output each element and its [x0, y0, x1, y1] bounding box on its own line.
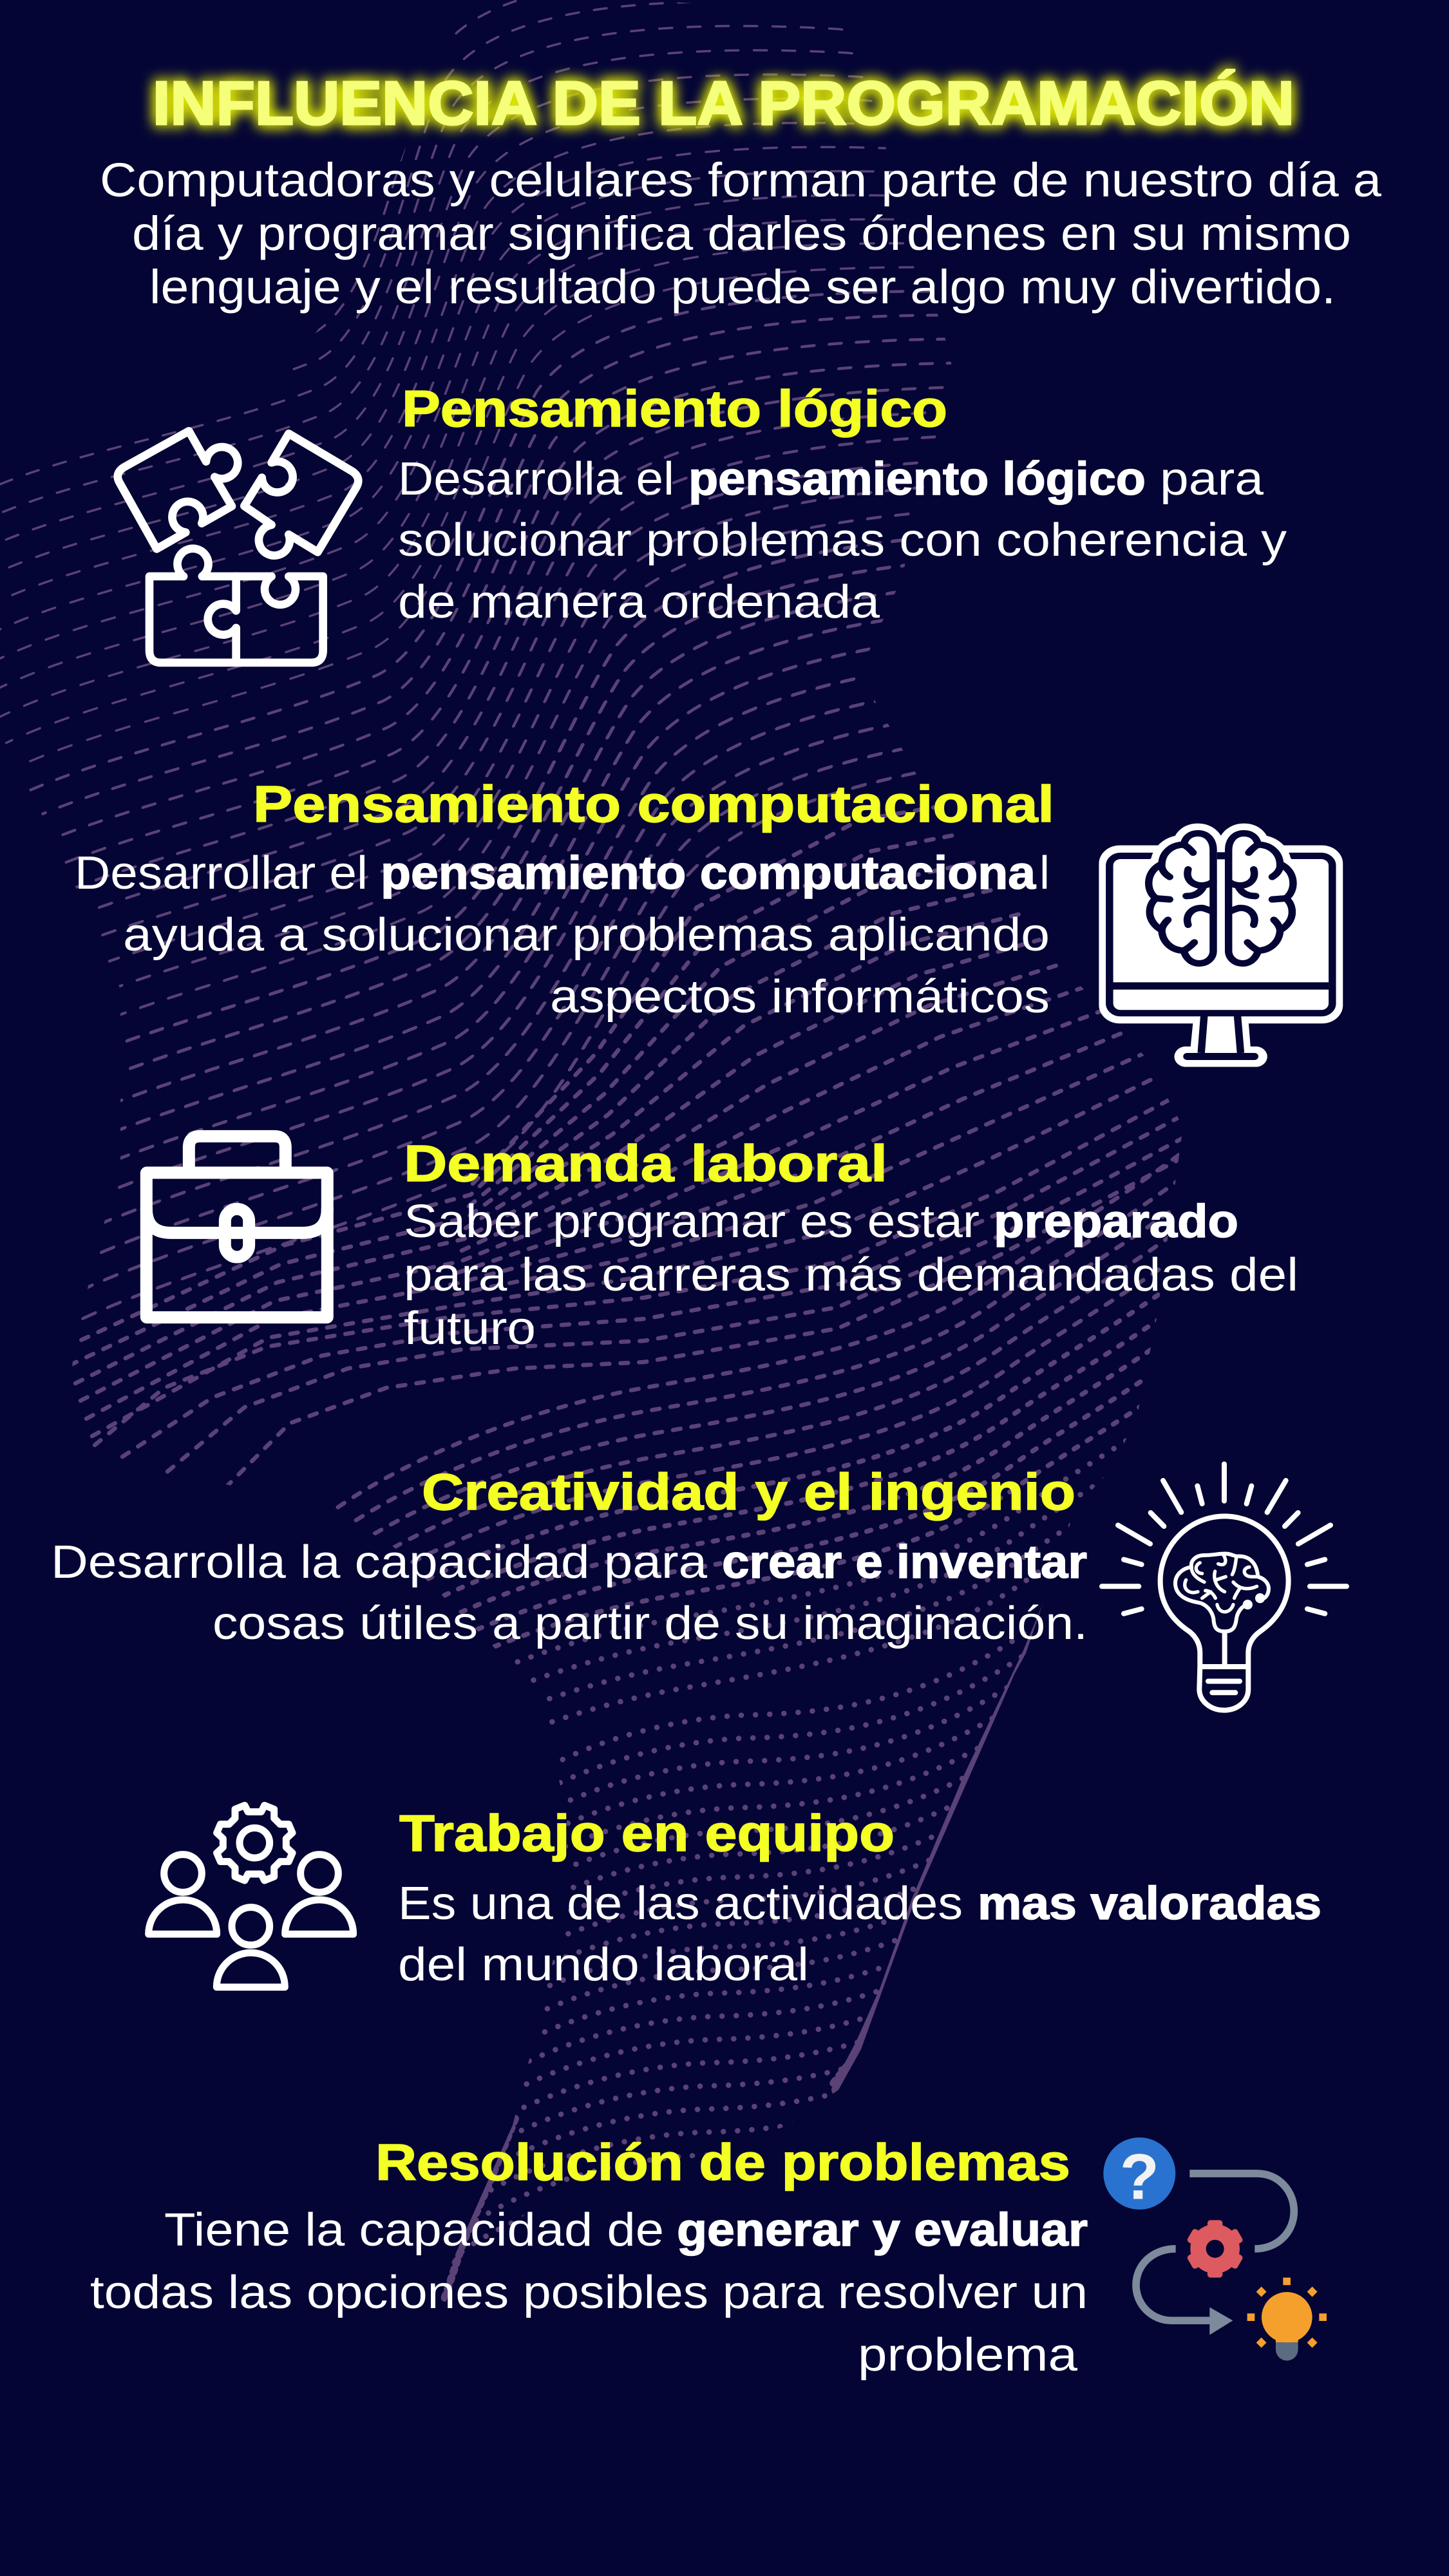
- arrow: path from question to gear to bulb: [1136, 2174, 1294, 2335]
- icon: briefcase: [146, 1136, 327, 1318]
- icon: orange light bulb: [1247, 2278, 1327, 2361]
- body text: [398, 1878, 1321, 1991]
- intro text: Computadoras y celulares forman parte de nuestro día a: [100, 153, 1382, 207]
- body text: [51, 1537, 1088, 1649]
- body text: ayuda a solucionar problemas aplicando: [123, 909, 1050, 961]
- intro text: día y programar significa darles órdenes en su mismo: [132, 207, 1351, 260]
- panel: Creatividad y el ingenio: [51, 1463, 1347, 1710]
- panel: Pensamiento computacional: [75, 775, 1343, 1067]
- body text: [75, 848, 1050, 1023]
- body text: del mundo laboral: [398, 1939, 809, 1991]
- heading: Pensamiento lógico: [402, 380, 947, 437]
- body text: pensamiento lógico: [688, 453, 1146, 505]
- heading: Creatividad y el ingenio: [422, 1463, 1075, 1520]
- body text: problema: [858, 2329, 1078, 2381]
- body text: solucionar problemas con coherencia y: [398, 515, 1287, 566]
- body text: de manera ordenada: [398, 576, 880, 628]
- body text: Desarrollar el: [75, 848, 368, 899]
- title: INFLUENCIA DE LA PROGRAMACIÓN: [153, 69, 1294, 138]
- icon: puzzle pieces: [118, 431, 358, 663]
- body text: futuro: [404, 1303, 536, 1354]
- body text: preparado: [994, 1196, 1238, 1247]
- icon: question mark circle: [1103, 2137, 1175, 2213]
- body text: Desarrolla el: [398, 453, 674, 505]
- body text: mas valoradas: [978, 1878, 1321, 1929]
- body text: para: [1160, 453, 1264, 505]
- background: dotted wave: [0, 0, 1182, 2302]
- panel: Trabajo en equipo: [149, 1804, 1321, 1991]
- heading: Trabajo en equipo: [399, 1804, 895, 1862]
- icon: monitor with brain: [1099, 833, 1343, 1067]
- icon: problem solving flow: [1103, 2137, 1327, 2361]
- heading: Pensamiento computacional: [253, 775, 1054, 833]
- icon: light bulb with brain: [1102, 1464, 1347, 1710]
- heading: Demanda laboral: [404, 1135, 887, 1192]
- body text: Es una de las actividades: [398, 1878, 963, 1929]
- body text: aspectos informáticos: [550, 971, 1050, 1023]
- panel: Demanda laboral: [146, 1135, 1298, 1354]
- body text: para las carreras más demandadas del: [404, 1249, 1298, 1301]
- panel: Pensamiento lógico: [118, 380, 1287, 663]
- intro text: [100, 153, 1382, 314]
- body text: [404, 1196, 1298, 1354]
- body text: Desarrolla la capacidad para: [51, 1537, 708, 1588]
- heading: Resolución de problemas: [375, 2134, 1070, 2191]
- body text: l: [1039, 848, 1050, 899]
- body text: Tiene la capacidad de: [164, 2204, 664, 2256]
- body text: cosas útiles a partir de su imaginación.: [213, 1598, 1088, 1649]
- panel: Resolución de problemas: [90, 2134, 1327, 2381]
- body text: [90, 2204, 1088, 2381]
- body text: todas las opciones posibles para resolver un: [90, 2267, 1088, 2318]
- body text: crear e inventar: [722, 1537, 1087, 1588]
- intro text: lenguaje y el resultado puede ser algo muy divertido.: [149, 260, 1336, 314]
- icon: question mark circle: ?: [1120, 2141, 1159, 2213]
- body text: pensamiento computaciona: [381, 848, 1036, 899]
- icon: red gear: [1186, 2220, 1244, 2278]
- body text: [398, 453, 1287, 628]
- body text: Saber programar es estar: [404, 1196, 980, 1247]
- icon: team with gear: [149, 1805, 354, 1987]
- body text: generar y evaluar: [677, 2204, 1088, 2256]
